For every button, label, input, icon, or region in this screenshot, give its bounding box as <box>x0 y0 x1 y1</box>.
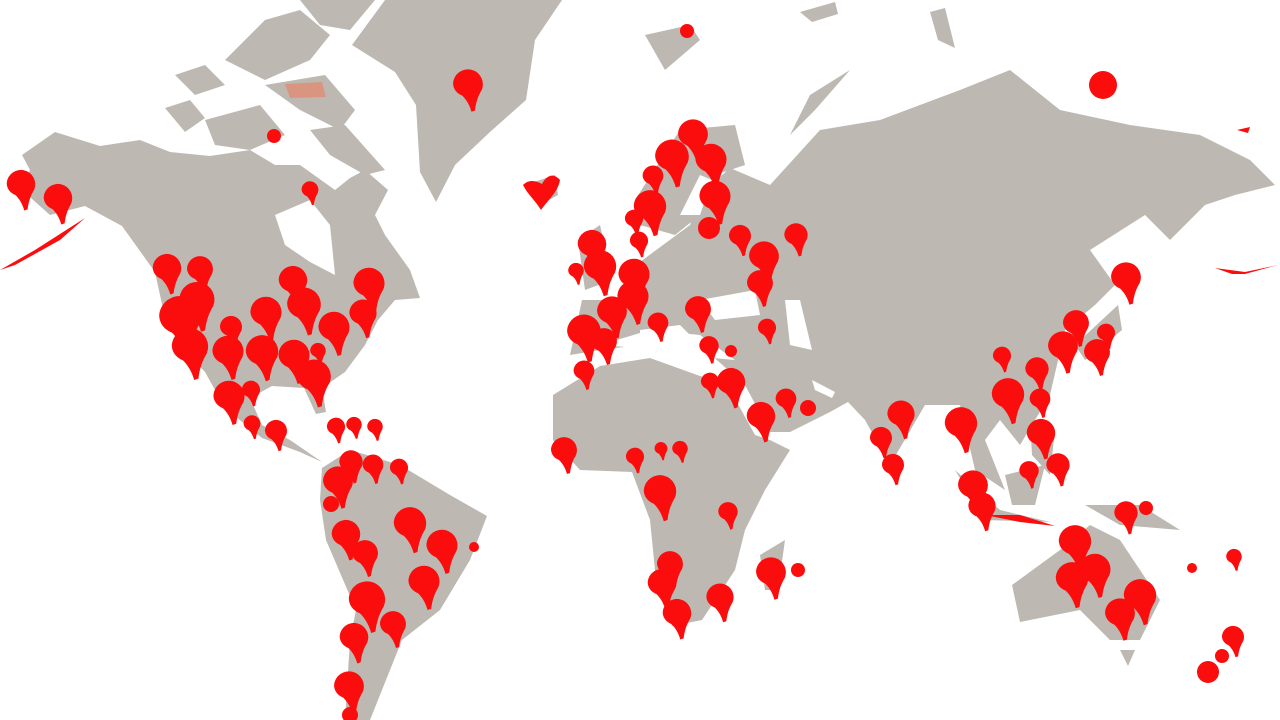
Persian Gulf <box>812 380 835 398</box>
landmass: Madagascar <box>760 540 785 590</box>
pins: United States and Central America <box>153 254 385 451</box>
orange highlight: Baffin Island <box>285 82 326 98</box>
Hudson Bay <box>275 200 335 275</box>
landmass: Japan and Philippines <box>1030 305 1122 475</box>
landmass: Arctic Canada islands <box>165 0 385 175</box>
lakes and seas <box>275 175 835 440</box>
Red Sea <box>722 375 770 440</box>
landmass: Eurasia <box>570 70 1275 490</box>
landmass: Indonesia and New Guinea <box>955 465 1180 530</box>
landmass: Svalbard and Novaya Zemlya <box>645 2 955 135</box>
pins: Asia <box>870 262 1153 534</box>
landmass: South America <box>320 450 487 720</box>
pins: South America <box>323 450 479 720</box>
pins: Alaska <box>0 170 85 270</box>
Mediterranean Sea <box>600 330 735 360</box>
pins: Africa and Middle East <box>551 336 816 640</box>
Baltic Sea <box>680 175 712 215</box>
landmass: Tasmania <box>1120 650 1135 666</box>
Black Sea <box>700 290 760 320</box>
landmass: Scandinavia <box>635 125 745 235</box>
pins: Australia and Pacific <box>985 127 1278 683</box>
pins: Northern and Western Europe <box>567 119 808 390</box>
landmass: Greenland <box>352 0 562 202</box>
landmass: Africa <box>553 358 790 626</box>
landmass: North America <box>22 132 420 462</box>
landmass: Iceland and Britain <box>525 175 612 290</box>
landmass: Australia <box>1012 525 1160 640</box>
pins: Arctic and Greenland <box>267 24 1117 210</box>
Caspian Sea <box>785 300 812 350</box>
